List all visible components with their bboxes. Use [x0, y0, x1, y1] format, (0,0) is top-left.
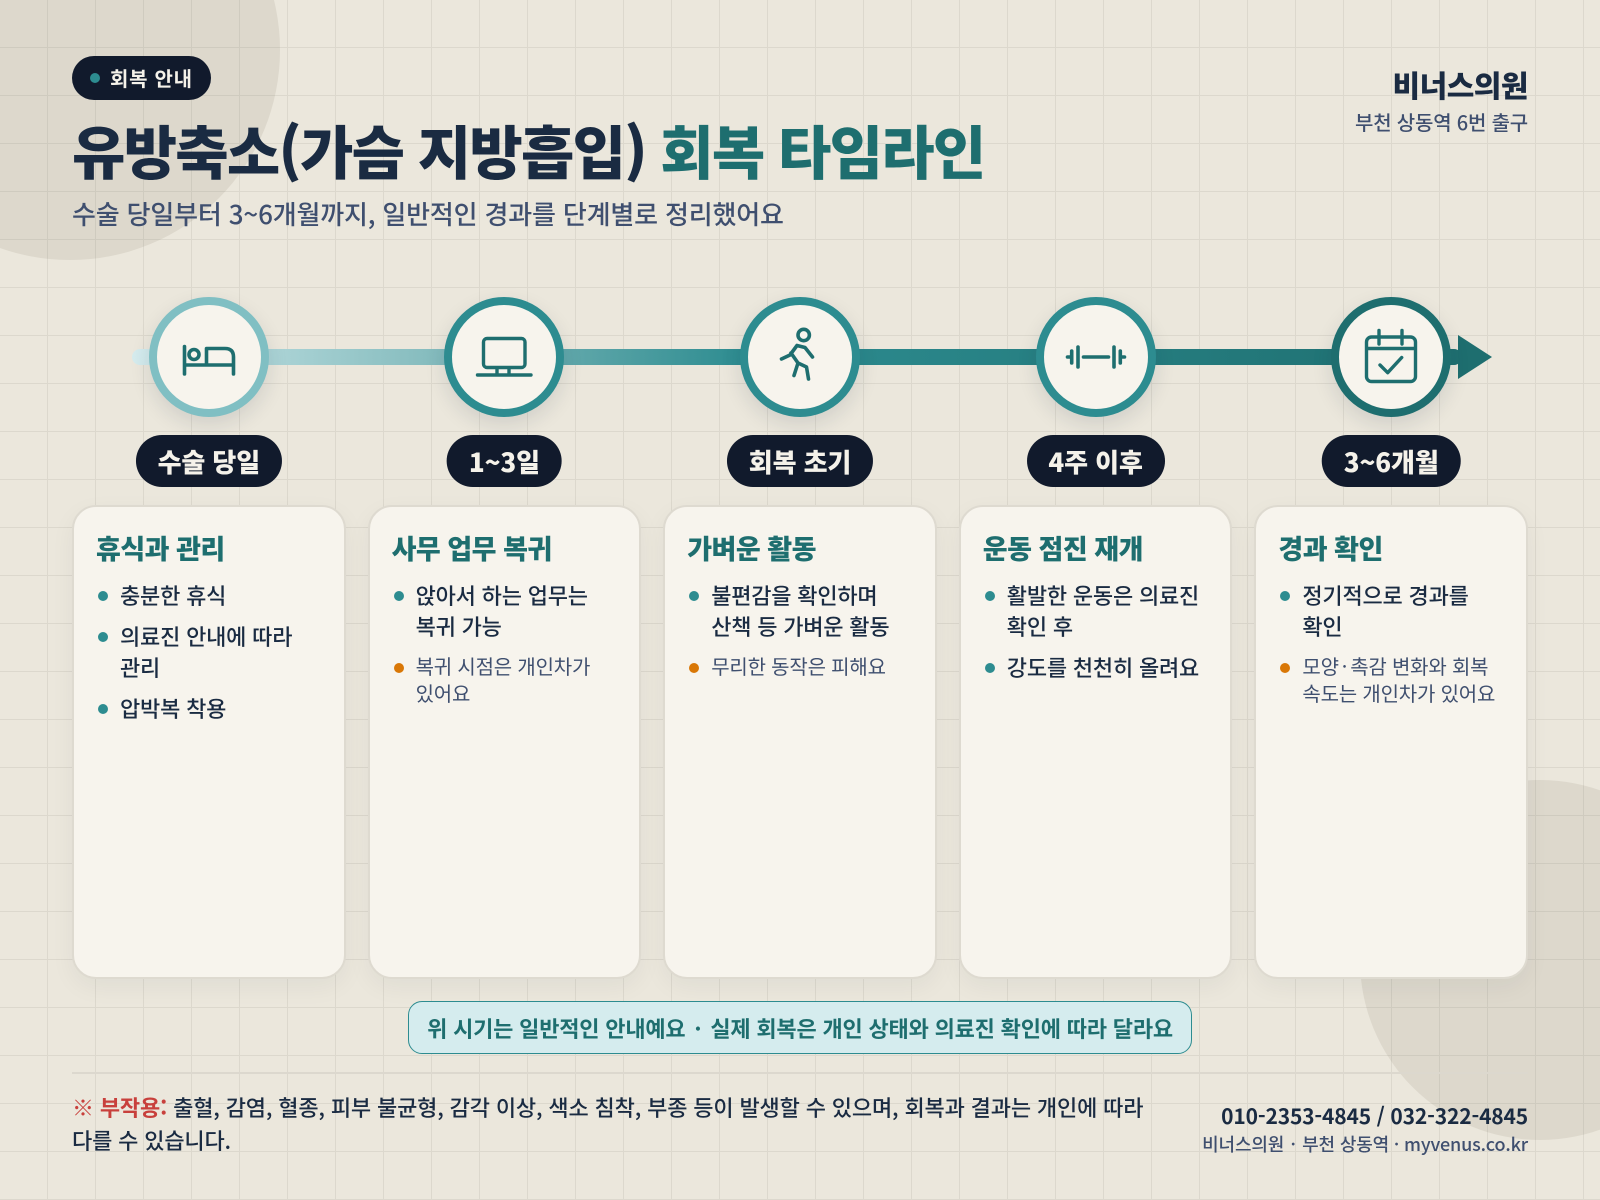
icon: calendar — [1364, 328, 1418, 384]
card heading: 경과 확인 — [1278, 528, 1383, 567]
list item — [711, 580, 889, 642]
caution item — [416, 652, 590, 706]
time label: early recovery — [727, 435, 873, 487]
icon: bed — [182, 344, 236, 376]
list item: 산책 등 가벼운 활동 — [711, 610, 889, 642]
list item: 충분한 휴식 — [120, 579, 226, 611]
list item — [120, 621, 292, 683]
time label: early recovery: 회복 초기 — [749, 443, 851, 480]
list item: 의료진 안내에 따라 — [120, 620, 292, 652]
callout: timing note: 위 시기는 일반적인 안내예요 · 실제 회복은 개인 상태와 의료진 확인에 따라 달라요 — [427, 1012, 1173, 1044]
step 2 node: laptop icon — [444, 297, 564, 417]
background circle: bottom right — [1360, 780, 1600, 1140]
clinic location: 부천 상동역 6번 출구 — [1355, 107, 1528, 136]
time label: surgery day: 수술 당일 — [158, 443, 260, 480]
time label: surgery day — [136, 435, 282, 487]
background circle: top left — [0, 0, 280, 260]
list item: 활발한 운동은 의료진 — [1007, 579, 1199, 611]
list item: 확인 — [1302, 610, 1342, 642]
clinic name: 비너스의원 — [1392, 62, 1528, 106]
caution item: 무리한 동작은 피해요 — [711, 651, 886, 680]
icon: walking person — [780, 328, 814, 381]
clinic name and location — [1355, 62, 1528, 136]
title: 유방축소(가슴 지방흡입) 회복 타임라인 — [72, 107, 984, 191]
card heading: 운동 점진 재개 — [983, 528, 1143, 567]
step 3 node: walking person icon — [740, 297, 860, 417]
time label: 3-6 months: 3~6개월 — [1344, 443, 1439, 480]
card heading: 사무 업무 복귀 — [392, 528, 552, 567]
list item: 복귀 가능 — [416, 610, 502, 642]
timeline arrow line — [132, 335, 1492, 379]
clinic and website: 비너스의원 · 부천 상동역 · myvenus.co.kr — [1202, 1131, 1528, 1157]
caution item: 복귀 시점은 개인차가 — [416, 651, 590, 680]
time label: 3-6 months — [1322, 435, 1460, 487]
panel: gradually resume exercise — [959, 505, 1232, 979]
step 1 node: bed icon — [149, 297, 269, 417]
icon: laptop — [476, 336, 533, 377]
list item: 앉아서 하는 업무는 — [416, 579, 588, 611]
list item — [1302, 580, 1469, 642]
list item: 정기적으로 경과를 — [1302, 579, 1469, 611]
step 5 node: calendar icon — [1331, 297, 1451, 417]
time label: after 4 weeks — [1027, 435, 1165, 487]
list item: 압박복 착용 — [120, 692, 226, 724]
side effects notice: ※ 부작용: 출혈, 감염, 혈종, 피부 불균형, 감각 이상, 색소 침착, 부종 등이 발생할 수 있으며, 회복과 결과는 개인에 따라 — [72, 1091, 1143, 1123]
step 4 node: dumbbell icon — [1036, 297, 1156, 417]
time label: 1-3 days — [447, 435, 562, 487]
side effects notice: 다를 수 있습니다. — [72, 1124, 231, 1156]
card heading: 휴식과 관리 — [96, 528, 225, 567]
caution item: 모양·촉감 변화와 회복 — [1302, 651, 1488, 680]
list item — [416, 580, 588, 642]
time label: after 4 weeks: 4주 이후 — [1048, 443, 1143, 480]
badge: recovery guide — [72, 56, 211, 100]
caution item — [1302, 652, 1495, 706]
badge dot — [90, 73, 100, 83]
panel: return to desk work — [368, 505, 641, 979]
panel: check the result — [1254, 505, 1528, 979]
list item: 강도를 천천히 올려요 — [1007, 651, 1199, 683]
badge text: 회복 안내 — [110, 63, 193, 92]
list item — [1007, 580, 1199, 642]
panel: rest and care — [72, 505, 346, 979]
list item: 확인 후 — [1007, 610, 1073, 642]
list item: 관리 — [120, 651, 160, 683]
card heading: 가벼운 활동 — [687, 528, 816, 567]
side effects notice — [72, 1091, 1143, 1156]
list item: 불편감을 확인하며 — [711, 579, 877, 611]
contact block — [1202, 1101, 1528, 1157]
panel: light activity — [663, 505, 937, 979]
phone numbers: 010-2353-4845 / 032-322-4845 — [1221, 1101, 1528, 1131]
subtitle: 수술 당일부터 3~6개월까지, 일반적인 경과를 단계별로 정리했어요 — [72, 195, 784, 232]
icon: dumbbell — [1066, 345, 1126, 369]
time label: 1-3 days: 1~3일 — [469, 443, 540, 480]
caution item: 속도는 개인차가 있어요 — [1302, 678, 1495, 707]
caution item: 있어요 — [416, 678, 470, 707]
callout: timing note — [408, 1001, 1192, 1054]
